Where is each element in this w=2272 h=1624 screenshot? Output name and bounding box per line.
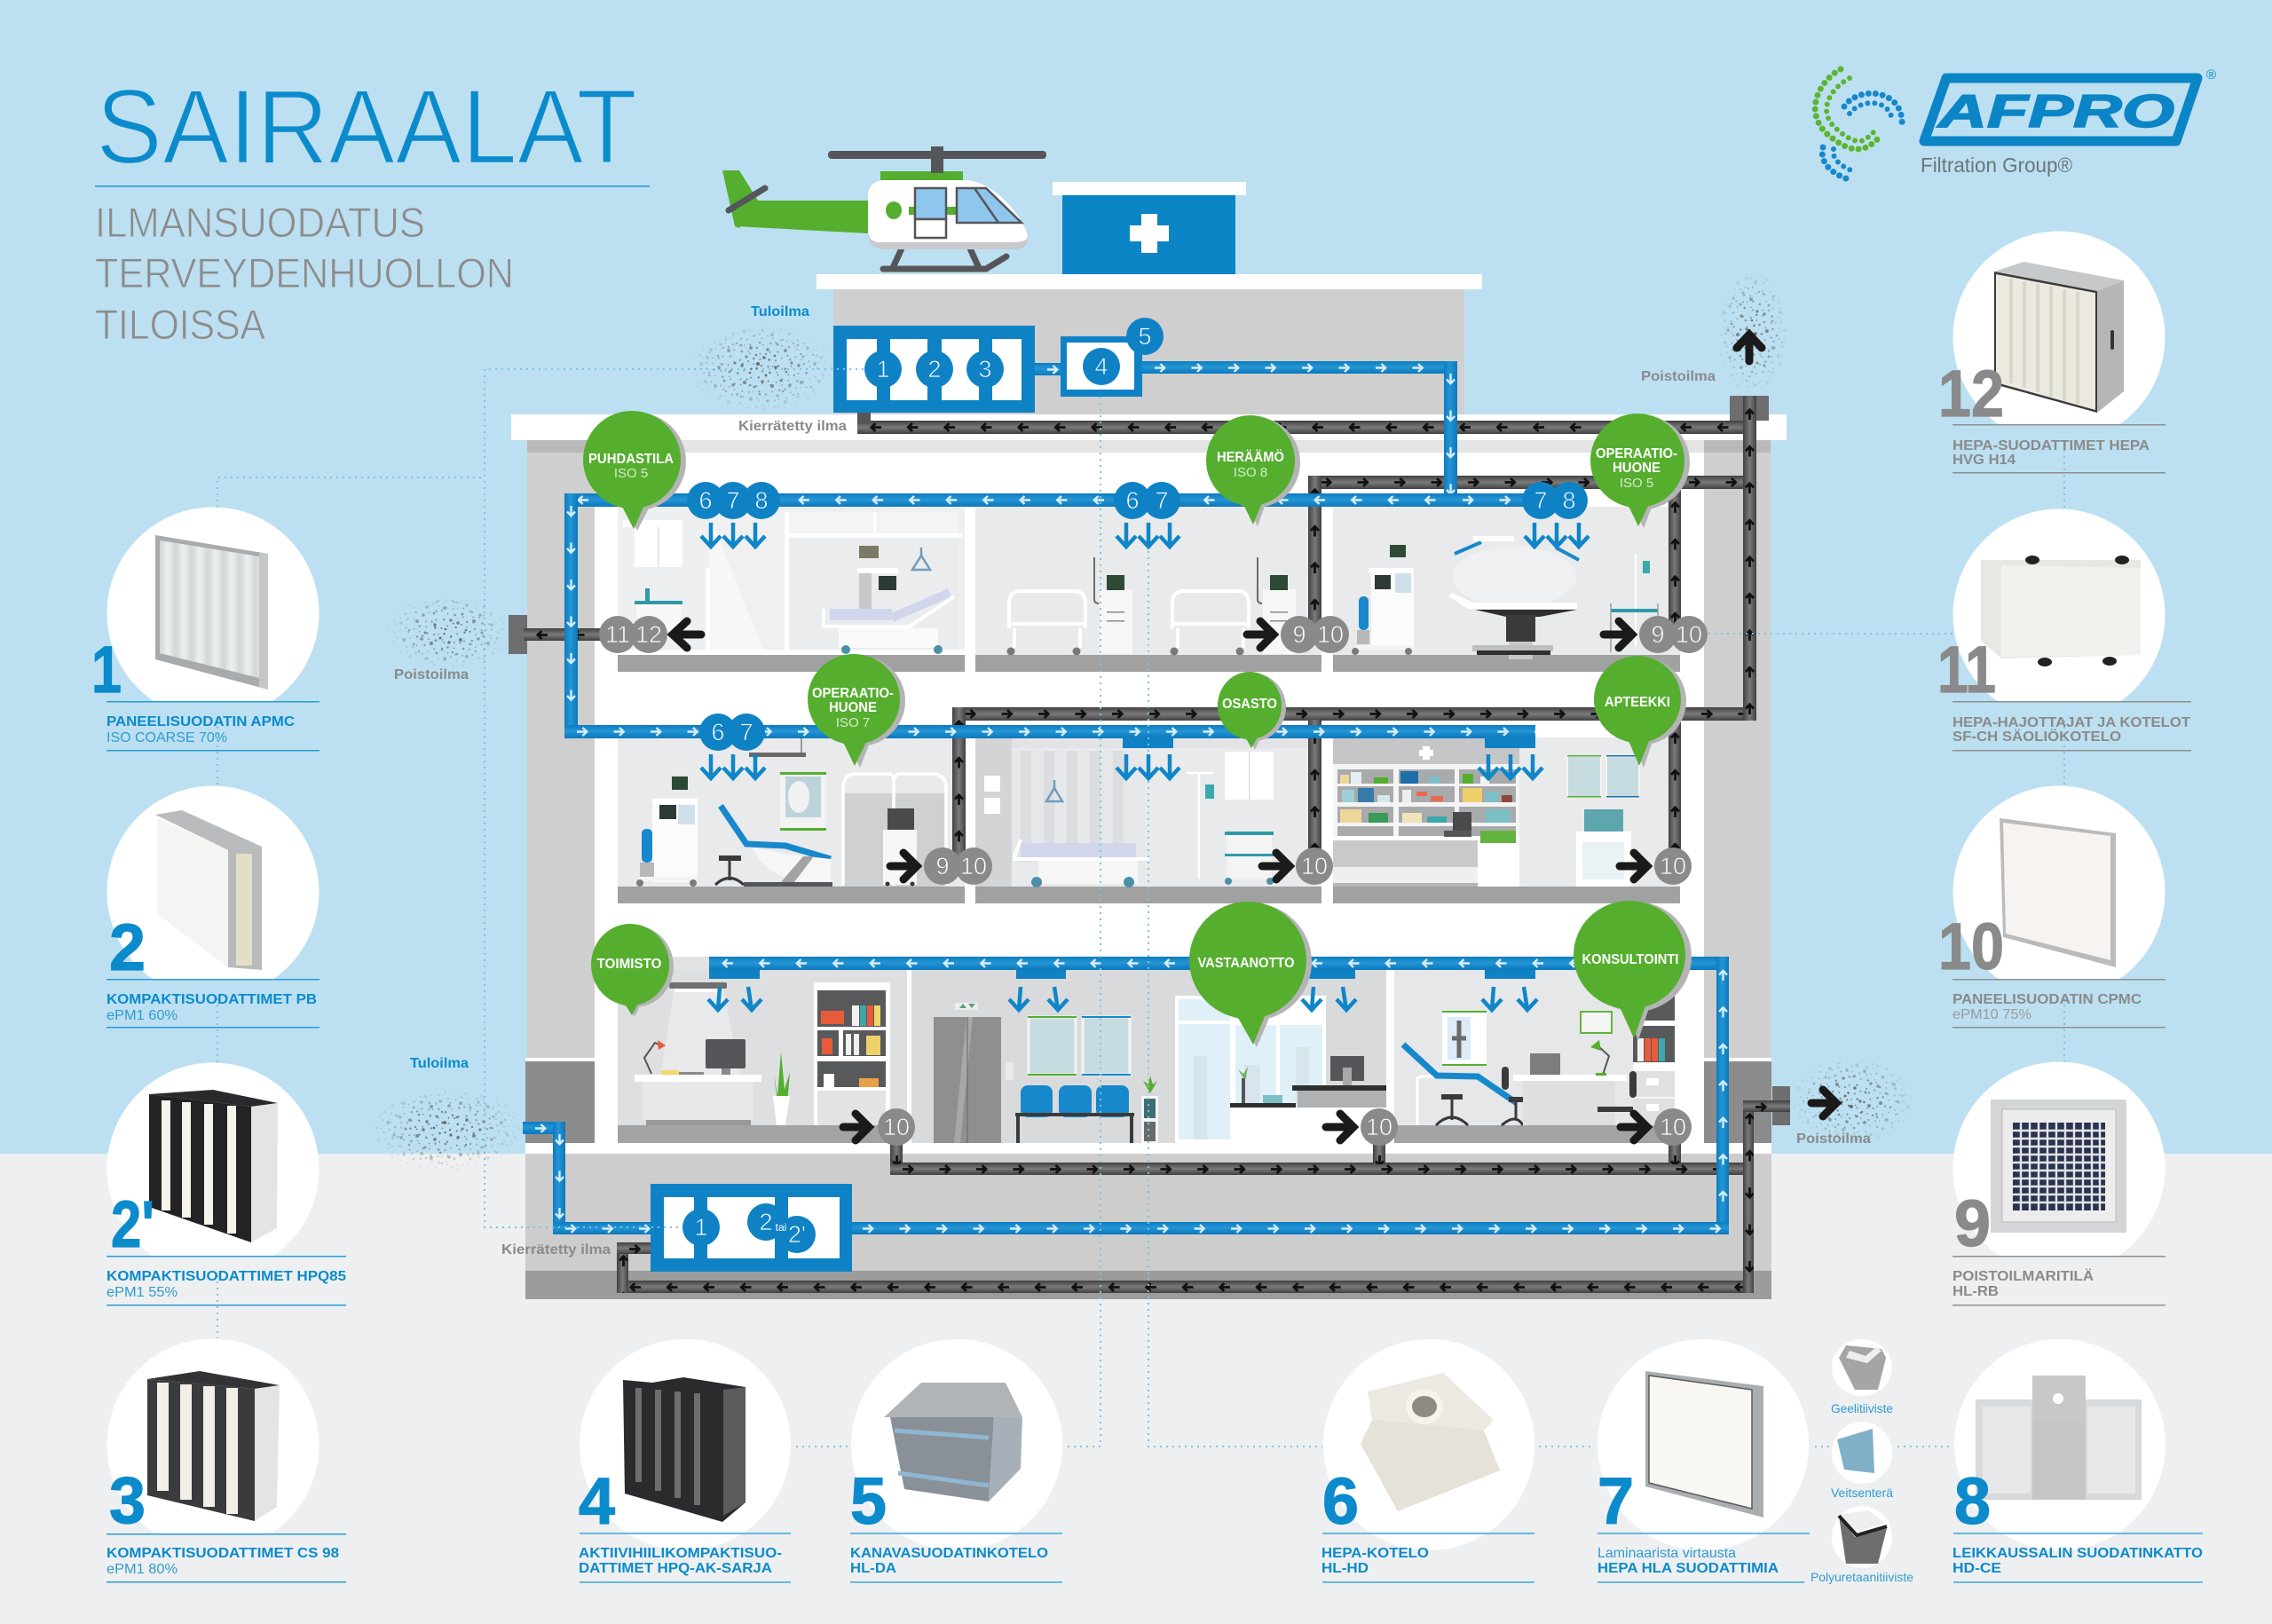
logo frame — [1924, 78, 2197, 141]
bubble: OPERAATIOHUONE ISO 5: OPERAATIO- — [1596, 446, 1677, 461]
grey filter markers: 10 — [1676, 621, 1702, 648]
pollution cloud: roof exhaust — [1719, 275, 1786, 392]
blue filter markers: 6 — [698, 487, 713, 514]
product 3: compact filter CS 98: KOMPAKTISUODATTIMET CS 98 — [106, 1546, 339, 1561]
bubble: HERÄÄMÖ — [1206, 415, 1300, 526]
product 5: duct filter housing: KANAVASUODATINKOTELO — [850, 1546, 1048, 1561]
bubble: HERÄÄMÖ: HERÄÄMÖ — [1217, 450, 1284, 465]
blue filter markers: 6 — [1125, 487, 1140, 514]
air flow labels: Tuloilma — [751, 304, 809, 319]
blue filter markers: 2 — [759, 1209, 773, 1235]
product 6: HEPA housing: 6 — [1322, 1464, 1359, 1538]
seal variant: gel seal — [1831, 1339, 1893, 1415]
subtitle: TERVEYDENHUOLLON — [95, 249, 514, 296]
air flow labels: Poistoilma — [1641, 369, 1716, 384]
product 12: HEPA filter HVG H14: HVG H14 — [1952, 453, 2016, 468]
bubble: OPERAATIOHUONE ISO 7: OPERAATIO- — [812, 686, 894, 701]
blue filter markers: tai — [776, 1221, 786, 1234]
supply air ducts — [523, 361, 1729, 1234]
product 5: duct filter housing: 5 — [850, 1464, 887, 1538]
grey filter markers: 12 — [635, 621, 662, 648]
product 6: HEPA housing: HL-HD — [1321, 1561, 1369, 1576]
grey filter markers: 10 — [1660, 1114, 1686, 1140]
background: sky — [0, 0, 2272, 1154]
seal variant: polyurethane seal: Polyuretaanitiiviste — [1810, 1570, 1913, 1584]
bubble: OPERAATIOHUONE ISO 7: ISO 7 — [836, 715, 870, 730]
room: ward — [975, 737, 1321, 903]
bubble: OPERAATIOHUONE ISO 5: HUONE — [1613, 461, 1661, 476]
logo swirl — [1815, 69, 1902, 180]
air flow labels: Kierrätetty ilma — [738, 419, 847, 434]
logo wordmark: AFPRO — [1936, 86, 2174, 138]
seal variant: polyurethane seal — [1810, 1506, 1913, 1584]
chimney and exhaust boxes — [509, 396, 1790, 1125]
blue filter markers: 2 — [927, 356, 942, 382]
air flow labels: Poistoilma — [394, 667, 469, 682]
room: operating room — [618, 737, 965, 903]
room: operating theatre — [1333, 507, 1680, 672]
blue filter markers: 7 — [1534, 487, 1548, 514]
product 9: exhaust grille HL-RB: POISTOILMARITILÄ — [1952, 1268, 2094, 1284]
floor 3 rooms — [618, 957, 1675, 1143]
seal variant: knife edge — [1831, 1422, 1893, 1500]
black extract arrows — [673, 335, 1836, 1140]
bubble: OPERAATIOHUONE ISO 7: HUONE — [829, 700, 877, 715]
product 12: HEPA filter HVG H14 — [1938, 231, 2166, 474]
room: cleanroom — [618, 507, 965, 672]
registered mark: ® — [2206, 67, 2216, 83]
bubble: KONSULTOINTI: KONSULTOINTI — [1582, 952, 1679, 967]
bubble: APTEEKKI: APTEEKKI — [1605, 695, 1670, 710]
grey filter markers: 9 — [1651, 621, 1665, 648]
product 7: HEPA HLA filter: 7 — [1598, 1464, 1634, 1538]
product 7: HEPA HLA filter: HEPA HLA SUODATTIMIA — [1598, 1561, 1779, 1576]
bubble: OPERAATIOHUONE ISO 5 — [1590, 414, 1690, 528]
product 3: compact filter CS 98 — [106, 1338, 346, 1583]
hospital building shell — [511, 414, 1787, 1299]
product 8: operating room filter ceiling: HD-CE — [1952, 1561, 2001, 1576]
grey filter markers — [599, 616, 1708, 1146]
room: consulting — [1394, 970, 1675, 1143]
product 8: operating room filter ceiling — [1952, 1339, 2203, 1583]
product 2: compact filter PB: KOMPAKTISUODATTIMET PB — [106, 992, 317, 1007]
title rule — [95, 185, 650, 187]
product 9: exhaust grille HL-RB — [1952, 1061, 2166, 1306]
bubble: VASTAANOTTO: VASTAANOTTO — [1198, 956, 1294, 971]
pollution cloud: low intake — [368, 1087, 524, 1171]
product 11: HEPA diffusers and housings: SF-CH SÄOLIÖKOTELO — [1952, 728, 2121, 745]
logo tagline: Filtration Group® — [1921, 154, 2072, 177]
grey filter markers: 10 — [960, 853, 987, 879]
grey filter markers: 10 — [1366, 1114, 1392, 1140]
product 5: duct filter housing: HL-DA — [850, 1561, 896, 1576]
product 7: HEPA HLA filter — [1598, 1339, 1810, 1583]
grey filter markers: 11 — [605, 621, 630, 648]
bubble: OSASTO: OSASTO — [1222, 697, 1277, 712]
bubble: PUHDASTILA: PUHDASTILA — [588, 452, 674, 467]
product 4: carbon compact filter: DATTIMET HPQ-AK-SARJA — [579, 1561, 772, 1576]
product 1: panel filter APMC: 1 — [91, 633, 122, 706]
product 2: compact filter PB — [106, 786, 320, 1028]
pollution cloud: floor exhaust — [389, 596, 506, 668]
product 8: operating room filter ceiling: LEIKKAUSSALIN SUODATINKATTO — [1952, 1546, 2203, 1561]
bubble: PUHDASTILA: ISO 5 — [614, 466, 648, 481]
blue filter markers: 5 — [1138, 323, 1152, 350]
product 4: carbon compact filter: AKTIIVIHIILIKOMPAKTISUO- — [579, 1546, 782, 1561]
product 2: compact filter PB: ePM1 60% — [106, 1008, 178, 1023]
bubble: PUHDASTILA — [583, 411, 686, 531]
dotted connectors — [217, 369, 2064, 1447]
bubble: TOIMISTO: TOIMISTO — [596, 957, 662, 972]
grey filter markers: 10 — [1301, 853, 1328, 879]
air handling unit: top — [833, 326, 1035, 413]
bubble: KONSULTOINTI — [1574, 901, 1692, 1040]
helicopter — [722, 146, 1046, 270]
pollution cloud: top intake — [688, 324, 834, 413]
product 9: exhaust grille HL-RB: HL-RB — [1952, 1284, 1999, 1299]
blue filter markers: 4 — [1094, 353, 1108, 380]
air handling unit: basement — [651, 1184, 852, 1272]
product 8: operating room filter ceiling: 8 — [1954, 1464, 1991, 1538]
grey filter markers: 10 — [1317, 621, 1344, 648]
background: ground — [0, 1154, 2272, 1624]
product 7: HEPA HLA filter: Laminaarista virtausta — [1598, 1546, 1736, 1561]
grey filter markers: 9 — [1292, 621, 1306, 648]
air flow labels: Tuloilma — [410, 1056, 469, 1071]
blue filter markers: 7 — [726, 487, 740, 514]
product 12: HEPA filter HVG H14: 12 — [1938, 357, 2004, 430]
bubble: TOIMISTO — [591, 924, 674, 1017]
bubble: OPERAATIOHUONE ISO 7 — [808, 654, 905, 768]
blue filter markers: 1 — [876, 356, 890, 382]
product 10: panel filter CPMC: 10 — [1938, 910, 2004, 983]
product 2: compact filter PB: 2 — [109, 911, 146, 984]
blue filter markers: 2' — [788, 1221, 806, 1248]
bubble: HERÄÄMÖ: ISO 8 — [1234, 465, 1267, 480]
product 6: HEPA housing — [1321, 1339, 1534, 1583]
floor 1 rooms — [618, 507, 1680, 672]
blue filter markers: 8 — [1562, 487, 1576, 514]
blue filter markers: 7 — [739, 719, 753, 745]
blue supply arrows — [701, 523, 1589, 1010]
room: pharmacy — [1333, 737, 1680, 903]
title: SAIRAALAT — [96, 67, 637, 186]
subtitle — [95, 199, 514, 348]
pollution cloud: side exhaust — [1795, 1058, 1912, 1141]
product 9: exhaust grille HL-RB: 9 — [1954, 1186, 1991, 1260]
blue filter markers: 1 — [694, 1214, 708, 1241]
bubble: OPERAATIOHUONE ISO 5: ISO 5 — [1620, 476, 1653, 491]
product 2': compact filter HPQ85: ePM1 55% — [106, 1285, 178, 1300]
product 10: panel filter CPMC — [1938, 786, 2166, 1028]
penthouse — [816, 274, 1482, 414]
blue filter markers: 6 — [711, 719, 725, 745]
blue filter markers: 7 — [1155, 487, 1169, 514]
room: recovery — [975, 507, 1321, 672]
product 4: carbon compact filter: 4 — [579, 1464, 615, 1538]
product 6: HEPA housing: HEPA-KOTELO — [1321, 1546, 1429, 1561]
product 1: panel filter APMC — [91, 508, 320, 751]
room: reception — [1175, 970, 1386, 1143]
filter box 4 — [1061, 336, 1142, 397]
product 12: HEPA filter HVG H14: HEPA-SUODATTIMET HEPA — [1952, 438, 2150, 453]
air flow labels: Kierrätetty ilma — [501, 1242, 611, 1257]
bubble: APTEEKKI — [1594, 656, 1686, 768]
grey filter markers: 9 — [935, 853, 950, 879]
bubble: OSASTO — [1218, 672, 1286, 750]
product 3: compact filter CS 98: ePM1 80% — [106, 1562, 178, 1577]
diffuser blocks — [709, 737, 1535, 979]
air flow labels — [394, 304, 1871, 1257]
product 11: HEPA diffusers and housings: HEPA-HAJOTTAJAT JA KOTELOT — [1952, 715, 2190, 730]
title block — [95, 67, 650, 348]
product 2': compact filter HPQ85 — [106, 1063, 346, 1306]
blue filter markers: 8 — [754, 487, 769, 514]
product 10: panel filter CPMC: ePM10 75% — [1952, 1007, 2031, 1022]
blue filter markers — [682, 318, 1588, 1253]
product 1: panel filter APMC: PANEELISUODATIN APMC — [106, 714, 295, 729]
logo: AFPRO Filtration Group — [1815, 67, 2216, 180]
grey filter markers: 10 — [1660, 853, 1686, 879]
air flow labels: Poistoilma — [1796, 1131, 1871, 1147]
recirculation and exhaust ducts — [524, 396, 1790, 1293]
product 1: panel filter APMC: ISO COARSE 70% — [106, 730, 227, 745]
product 2': compact filter HPQ85: 2' — [111, 1187, 154, 1261]
subtitle: ILMANSUODATUS — [95, 199, 425, 246]
subtitle: TILOISSA — [95, 301, 266, 348]
blue filter markers: 3 — [978, 356, 992, 382]
grey filter markers: 10 — [883, 1114, 910, 1140]
seal variant: knife edge: Veitsenterä — [1831, 1486, 1893, 1500]
rooftop helipad box with cross — [1053, 182, 1246, 275]
product 10: panel filter CPMC: PANEELISUODATIN CPMC — [1952, 992, 2142, 1007]
product 4: carbon compact filter — [579, 1339, 791, 1583]
seal variant: gel seal: Geelitiiviste — [1831, 1401, 1893, 1415]
bubble: VASTAANOTTO — [1189, 902, 1312, 1047]
room: office — [618, 957, 907, 1143]
room: lobby — [911, 970, 1175, 1143]
product 5: duct filter housing — [850, 1339, 1062, 1583]
product 11: HEPA diffusers and housings: 11 — [1937, 633, 1996, 706]
floor 2 rooms — [618, 737, 1680, 903]
product 11: HEPA diffusers and housings — [1937, 509, 2191, 751]
product 2': compact filter HPQ85: KOMPAKTISUODATTIMET HPQ85 — [106, 1269, 346, 1284]
product 3: compact filter CS 98: 3 — [109, 1463, 146, 1537]
